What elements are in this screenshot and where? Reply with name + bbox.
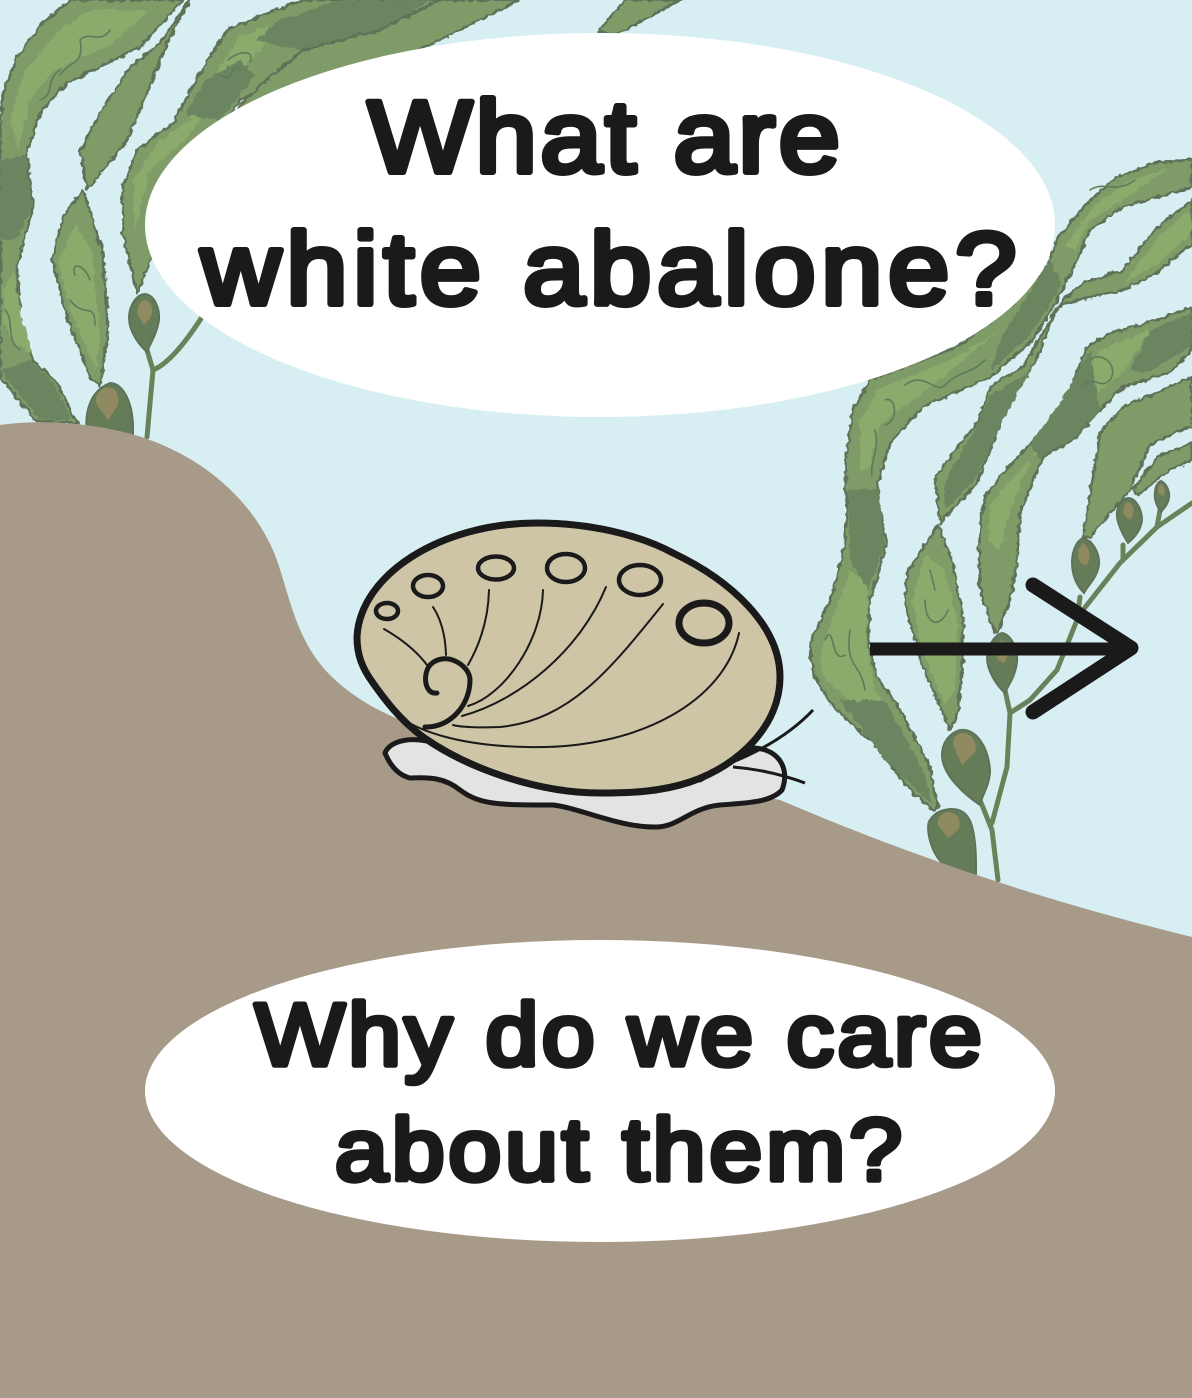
float: [129, 294, 159, 352]
large left blade: [0, 0, 183, 423]
speech bubble: why do we care: [145, 940, 1055, 1242]
blade five: [979, 307, 1192, 633]
blade one: largest: [810, 160, 1192, 810]
icon: abalone: [357, 523, 813, 827]
question line one: Why do we care: [255, 986, 982, 1084]
small top blade: [80, 0, 190, 190]
heading line two: white abalone?: [200, 213, 1016, 326]
kelp: right group: [810, 160, 1192, 880]
float: [942, 730, 990, 805]
arrow: [870, 585, 1131, 712]
float: [928, 809, 976, 875]
blade squiggles: [5, 30, 251, 350]
blade three: oval: [905, 525, 963, 730]
blade two: [935, 200, 1192, 523]
speech bubble: what are white abalone: [145, 33, 1055, 417]
oval blade: [52, 190, 108, 387]
shell ridges: [384, 587, 739, 747]
shell spiral: [425, 659, 470, 727]
third blade running behind the bubble: [122, 0, 460, 293]
float: [987, 633, 1017, 693]
shell: [357, 523, 780, 793]
blade six: [1083, 377, 1192, 537]
seabed ground: [0, 422, 1192, 1398]
blade squiggles: [825, 180, 1135, 690]
antennae: [720, 710, 813, 783]
top strand: [598, 0, 680, 34]
float: [1155, 481, 1169, 512]
foot: [385, 740, 785, 827]
float: [1072, 538, 1099, 593]
float: [86, 383, 133, 445]
question line two: about them?: [335, 1101, 902, 1199]
respiratory holes: [376, 554, 729, 643]
float: [1117, 498, 1142, 543]
fourth blade behind bubble: [240, 0, 520, 110]
blade seven: [1133, 443, 1192, 495]
heading line one: What are: [368, 81, 840, 194]
stems: [980, 503, 1192, 880]
kelp: upper left group: [0, 0, 680, 445]
stems: [147, 317, 202, 437]
